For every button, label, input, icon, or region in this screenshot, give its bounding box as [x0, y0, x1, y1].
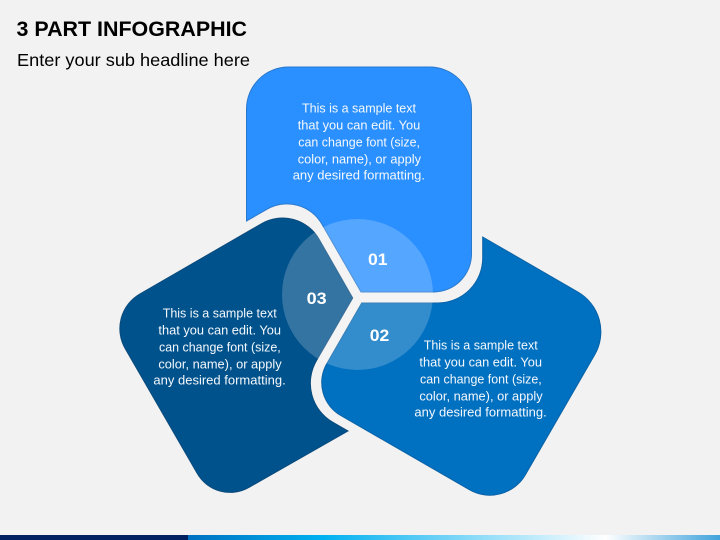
number 03: 03 — [307, 289, 327, 308]
text block: top panel: can change font (size, — [298, 134, 420, 149]
shape: top panel — [246, 67, 472, 292]
text block: left panel: any desired formatting. — [153, 372, 286, 388]
shape: right panel — [322, 237, 601, 495]
text block: top panel: that you can edit. You — [298, 117, 420, 132]
text block: right panel: This is a sample text — [424, 337, 538, 352]
text block: right panel: any desired formatting. — [414, 404, 547, 419]
number 02: 02 — [370, 326, 389, 345]
text block: right panel: that you can edit. You — [419, 354, 542, 369]
title: 3 PART INFOGRAPHIC — [16, 17, 247, 41]
text block: right panel: color, name), or apply — [419, 388, 543, 403]
text block: left panel: can change font (size, — [159, 340, 281, 354]
text block: left panel: that you can edit. You — [158, 322, 281, 338]
shape: left panel — [120, 218, 353, 492]
panel: 02 right — [322, 237, 601, 495]
panel: 03 left — [120, 218, 353, 492]
text block: right panel: can change font (size, — [420, 371, 542, 386]
text block: left panel: This is a sample text — [163, 306, 277, 320]
subtitle: Enter your sub headline here — [17, 50, 250, 70]
text block: left panel: color, name), or apply — [158, 356, 282, 372]
panel: 01 top — [246, 67, 472, 292]
text block: top panel — [293, 100, 425, 182]
number 01: 01 — [368, 250, 388, 269]
text block: top panel: color, name), or apply — [298, 151, 421, 166]
footer bar — [0, 535, 720, 540]
text block: top panel: This is a sample text — [302, 100, 416, 115]
text block: top panel: any desired formatting. — [293, 167, 425, 182]
text block: left panel — [153, 306, 286, 388]
center translucent circle — [282, 219, 433, 370]
text block: right panel — [414, 337, 547, 419]
